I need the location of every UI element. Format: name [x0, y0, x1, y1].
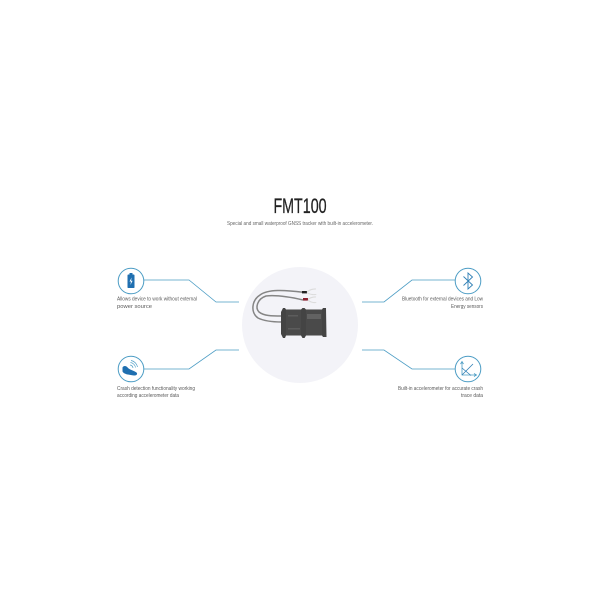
connector: crash detection	[144, 350, 239, 369]
text: bluetooth	[402, 296, 483, 310]
text: battery: power source	[117, 304, 152, 310]
icon: accelerometer	[455, 356, 481, 382]
text: bluetooth: Energy sensors	[451, 304, 483, 310]
text: battery: Allows device to work without external	[117, 296, 197, 302]
connector: accelerometer	[362, 350, 455, 369]
icon: bluetooth	[455, 268, 481, 294]
title: FMT100	[273, 194, 327, 218]
text: crash detection: according accelerometer data	[117, 393, 179, 399]
device image	[253, 289, 326, 338]
connector: battery	[144, 280, 239, 302]
icon: battery	[118, 268, 144, 294]
connector: bluetooth	[362, 280, 455, 302]
icon: crash detection	[118, 356, 144, 382]
text: accelerometer: Built-in accelerometer for accurate crash	[398, 386, 483, 392]
housing	[281, 308, 326, 338]
wires	[253, 291, 303, 322]
text: battery	[117, 296, 197, 310]
terminals	[302, 291, 307, 293]
background circle	[242, 267, 358, 383]
text: crash detection: Crash detection functionality working	[117, 386, 195, 392]
text: bluetooth: Bluetooth for external devices and Low	[402, 296, 483, 302]
text: accelerometer: trace data	[461, 393, 483, 399]
text: crash detection	[117, 386, 195, 399]
subtitle: Special and small waterproof GNSS tracker with built-in accelerometer.	[227, 221, 373, 227]
text: accelerometer	[398, 386, 483, 399]
